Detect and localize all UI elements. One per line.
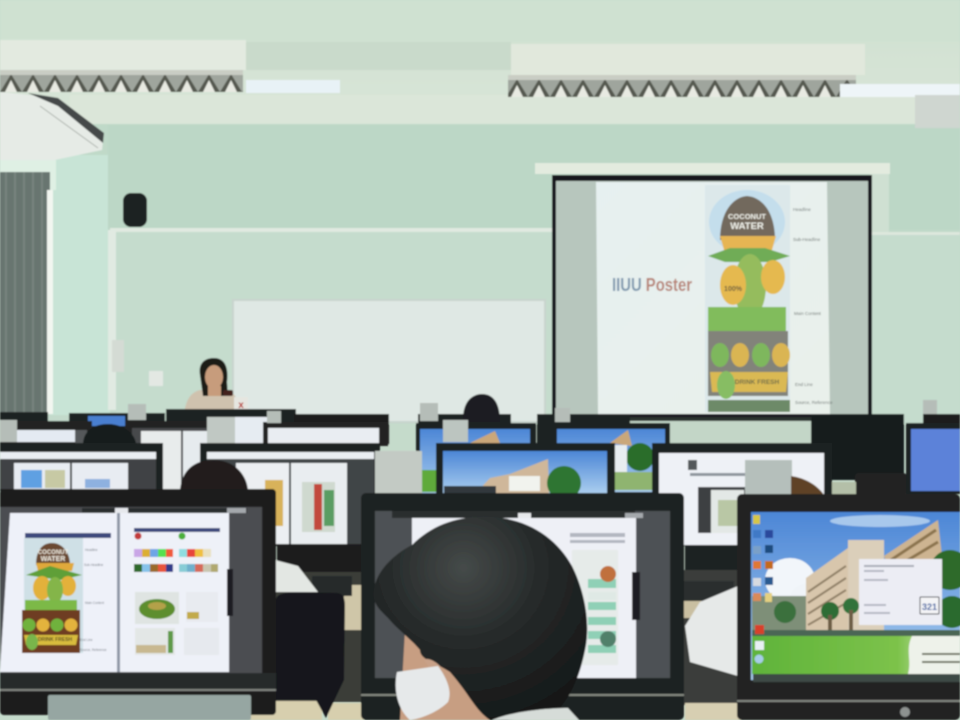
air conditioner (0, 92, 104, 162)
page divider (117, 513, 120, 672)
projection screen (552, 175, 872, 419)
left page: DRINK FRESH (38, 637, 72, 643)
third row monitor: wallpaper (436, 443, 615, 500)
left page: WATER (41, 556, 65, 563)
slide labels: Source, Reference (795, 400, 833, 405)
left page: Main Content (85, 601, 104, 605)
slide poster (705, 185, 790, 412)
far right light strip (840, 84, 960, 97)
left page: Source, Reference (80, 648, 107, 652)
presenter: x (238, 400, 244, 411)
slide labels: Sub-Headline (793, 237, 821, 242)
student shirt left (275, 560, 318, 592)
third row monitor: document window (652, 443, 832, 570)
left ceiling light fixture (0, 40, 246, 92)
slide poster: 100% (724, 286, 743, 293)
middle light strip (246, 42, 511, 93)
left page: COCONUT (38, 550, 68, 556)
side pillar beside screen (870, 174, 889, 232)
grey paper cards (0, 400, 937, 493)
slide labels (793, 207, 833, 405)
monitor stand (277, 544, 362, 572)
second row monitor: document (263, 422, 388, 446)
left page: Sub-Headline (84, 563, 104, 567)
switched off monitor (811, 414, 907, 495)
slide labels: End Line (795, 382, 813, 387)
right page (120, 513, 229, 672)
student ear (425, 659, 448, 705)
left page: End Line (80, 638, 93, 642)
third row monitor: left (0, 443, 163, 491)
podium marker (234, 397, 248, 411)
second row monitor: book pages (125, 421, 242, 491)
second row monitor: blue window (234, 417, 268, 444)
desktop icons (753, 515, 773, 664)
third row monitor: poster pages (200, 443, 380, 572)
student neck (400, 630, 520, 720)
whiteboard (233, 300, 545, 422)
keyboards (312, 576, 734, 601)
projector unit (915, 95, 960, 128)
student sleeve right (685, 586, 738, 676)
projector screen case (535, 163, 890, 174)
left page: Headline (85, 548, 98, 552)
brand logo (900, 707, 910, 717)
wall (0, 124, 960, 424)
presenter (184, 358, 248, 414)
321 icon: 321 (922, 602, 937, 612)
conduit pipe (108, 230, 116, 410)
slide poster: DRINK FRESH (735, 379, 780, 386)
ceiling (0, 0, 960, 130)
side tabs (227, 569, 233, 616)
second row monitor: campus wallpaper 2 (552, 423, 670, 493)
student hair (791, 476, 824, 495)
background person head (463, 394, 500, 422)
slide poster: COCONUT (728, 212, 766, 221)
window curtain (0, 160, 56, 414)
office chair (276, 592, 345, 718)
desks and mid ground (250, 570, 745, 720)
background person head (83, 424, 136, 443)
second row monitor: campus wallpaper (416, 423, 536, 495)
right ceiling light fixture (508, 44, 865, 97)
front monitor: poster pages (0, 489, 276, 720)
slide poster: WATER (730, 221, 764, 232)
front monitor: campus desktop (737, 494, 960, 720)
wall switches (112, 340, 163, 386)
second row monitor: far left (0, 421, 92, 445)
left page (0, 513, 117, 672)
slide labels: Headline (793, 207, 811, 212)
desktop wallpaper (751, 512, 960, 682)
shirt collar (492, 708, 579, 720)
installer dialog (859, 559, 942, 625)
student hair behind monitor (180, 460, 248, 490)
right blue monitor (906, 423, 960, 494)
grey card on front (48, 695, 251, 720)
slide labels: Main Content (794, 311, 822, 316)
wallpaper white fade with caption (908, 636, 960, 674)
back row monitors (0, 409, 960, 446)
face mask (396, 666, 450, 720)
student hair (374, 517, 587, 720)
grey paper card (745, 460, 792, 496)
slide title: IIUU Poster (612, 275, 692, 295)
front monitor: back of head (361, 493, 684, 720)
wall speaker (123, 193, 147, 227)
